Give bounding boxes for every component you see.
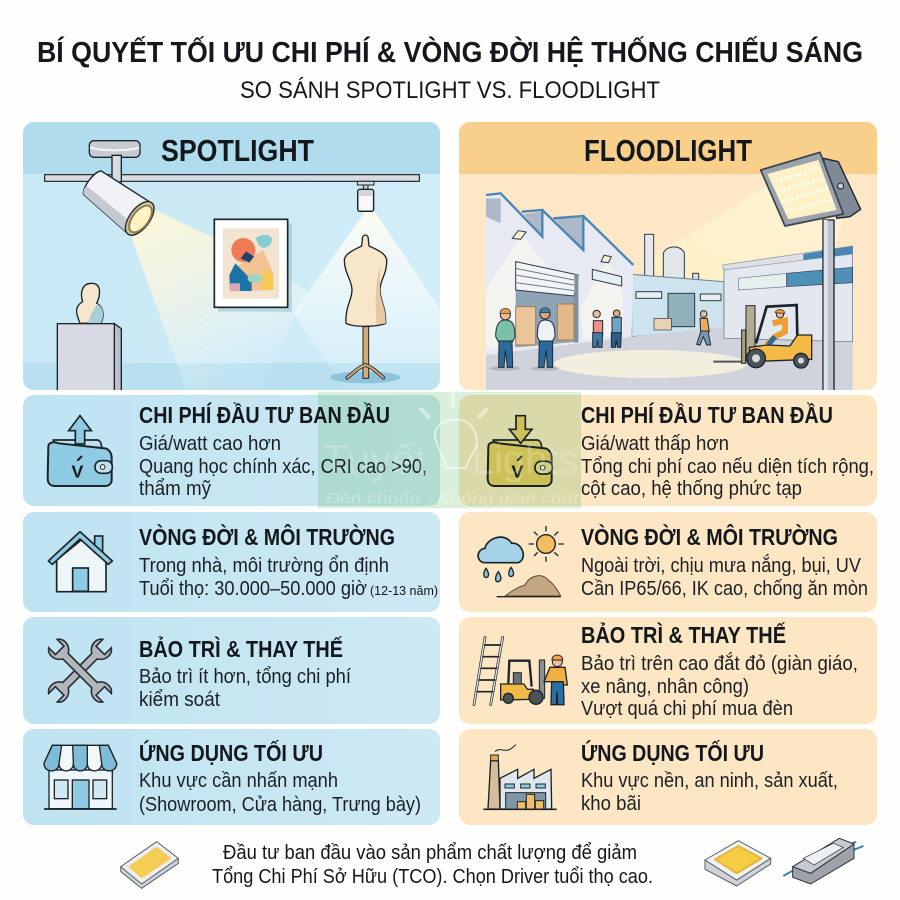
text: spotlight lifespan: (12-13 năm) (370, 583, 438, 598)
row card: floodlight lifespan (459, 512, 877, 612)
icon: LED driver (783, 838, 863, 884)
watermark: Tuyết (322, 436, 427, 483)
row card: spotlight maintenance (23, 617, 440, 724)
watermark: Đèn chuẩn - Không gian chất (326, 490, 579, 507)
text: floodlight lifespan: Cần IP65/66, IK cao, chống ăn mòn (581, 577, 868, 600)
left warehouse (486, 193, 633, 355)
main spotlight (82, 140, 155, 236)
text: spotlight lifespan: Tuổi thọ: 30.000–50.000 giờ (139, 577, 367, 600)
panel: spotlight illustration (23, 122, 450, 393)
icon: wallet arrow up: V (71, 461, 83, 481)
right building (723, 246, 853, 342)
watermark: Lights (472, 436, 578, 483)
text: floodlight maintenance: Vượt quá chi phí mua đèn (581, 697, 793, 720)
text: floodlight lifespan: VÒNG ĐỜI & MÔI TRƯỜNG (581, 523, 838, 550)
footer text: Tổng Chi Phí Sở Hữu (TCO). Chọn Driver tuổi thọ cao. (212, 866, 653, 888)
panel: floodlight illustration (459, 122, 877, 393)
row card: floodlight application (459, 729, 877, 825)
text: spotlight application: Khu vực cần nhấn mạnh (139, 769, 338, 792)
flood lamp and pole (761, 152, 861, 393)
text: spotlight maintenance: BẢO TRÌ & THAY THẾ (139, 634, 343, 662)
text: floodlight lifespan: Ngoài trời, chịu mưa nắng, bụi, UV (581, 554, 861, 577)
text: spotlight application: (Showroom, Cửa hàng, Trưng bày) (139, 793, 421, 816)
text: spotlight maintenance (139, 634, 351, 711)
icon: crossed wrenches (46, 637, 114, 705)
text: spotlight initial cost: thẩm mỹ (139, 477, 212, 500)
track (45, 175, 419, 190)
text: floodlight initial cost (581, 401, 874, 500)
text: floodlight initial cost: cột cao, hệ thống phức tạp (581, 477, 802, 500)
heading: floodlight: FLOODLIGHT (584, 133, 752, 168)
icon: wallet arrow down (488, 416, 552, 486)
text: floodlight application: Khu vực nền, an ninh, sản xuất, (581, 769, 838, 792)
row card: spotlight lifespan (23, 512, 440, 612)
subtitle: SO SÁNH SPOTLIGHT VS. FLOODLIGHT (240, 77, 660, 104)
text: floodlight application (581, 739, 838, 815)
text: spotlight lifespan: VÒNG ĐỜI & MÔI TRƯỜNG (139, 523, 395, 550)
text: spotlight application (139, 739, 421, 816)
text: floodlight maintenance: BẢO TRÌ & THAY THẾ (581, 620, 786, 648)
text: floodlight application: ỨNG DỤNG TỐI ƯU (581, 739, 764, 766)
footer text (212, 842, 653, 888)
icon: factory (483, 745, 557, 809)
text: floodlight maintenance (581, 620, 858, 720)
workers (490, 308, 711, 371)
picture (214, 219, 292, 312)
text: spotlight lifespan: Trong nhà, môi trường ổn định (139, 554, 389, 577)
text: floodlight application: kho bãi (581, 792, 641, 815)
text: floodlight initial cost: Giá/watt thấp hơn (581, 432, 729, 455)
icon: LED chip right (705, 841, 771, 886)
title: BÍ QUYẾT TỐI ƯU CHI PHÍ & VÒNG ĐỜI HỆ THỐNG CHIẾU SÁNG (37, 36, 863, 69)
text: spotlight maintenance: Bảo trì ít hơn, tổng chi phí (139, 665, 351, 688)
icon: wallet arrow down: V (511, 461, 523, 481)
text: spotlight initial cost: Giá/watt cao hơn (139, 432, 281, 455)
text: spotlight initial cost: Quang học chính xác, CRI cao >90, (139, 455, 427, 478)
row card: spotlight application (23, 729, 440, 825)
text: floodlight initial cost: CHI PHÍ ĐẦU TƯ BAN ĐẦU (581, 401, 833, 428)
pedestal and sculpture (57, 283, 121, 393)
text: spotlight lifespan (139, 523, 438, 600)
footer text: Đầu tư ban đầu vào sản phẩm chất lượng để giảm (223, 842, 637, 864)
icon: house (48, 532, 112, 592)
text: floodlight maintenance: xe nâng, nhân công) (581, 675, 749, 698)
forklift (713, 305, 812, 368)
pool of light (553, 350, 747, 378)
text: floodlight lifespan (581, 523, 868, 600)
text: floodlight maintenance: Bảo trì trên cao đắt đỏ (giàn giáo, (581, 652, 858, 675)
small track light (358, 189, 374, 211)
mannequin (330, 235, 400, 383)
icon: small LED chip left (121, 842, 178, 888)
row card: floodlight maintenance (459, 617, 877, 724)
watermark (318, 392, 581, 508)
text: spotlight maintenance: kiểm soát (139, 688, 220, 711)
text: spotlight application: ỨNG DỤNG TỐI ƯU (139, 739, 323, 766)
ground (486, 327, 853, 392)
text: floodlight initial cost: Tổng chi phí cao nếu diện tích rộng, (581, 455, 874, 478)
text: spotlight initial cost (139, 401, 427, 500)
icon: storefront (44, 745, 117, 809)
text: spotlight initial cost: CHI PHÍ ĐẦU TƯ BAN ĐẦU (139, 401, 390, 428)
icon: weather and dust (478, 526, 564, 597)
icon: ladder forklift worker (474, 637, 567, 705)
middle building and chimney (632, 234, 724, 337)
heading: spotlight: SPOTLIGHT (161, 133, 314, 168)
icon: wallet arrow up (48, 416, 112, 486)
row card: floodlight initial cost (459, 395, 877, 506)
row card: spotlight initial cost (23, 395, 440, 506)
